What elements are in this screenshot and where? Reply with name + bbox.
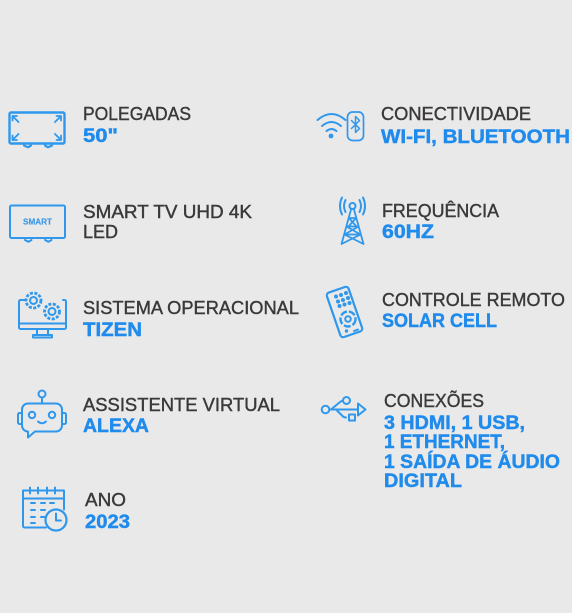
label: polegadas: POLEGADAS — [83, 104, 191, 124]
label: ano: 2023 — [85, 512, 130, 533]
label: controle remoto — [382, 290, 565, 332]
icon: remote control — [326, 286, 363, 338]
icon: calendar with clock — [23, 488, 66, 530]
icon: USB — [322, 397, 366, 420]
icon: wifi and bluetooth — [318, 112, 364, 140]
icon: robot assistant — [18, 390, 66, 438]
label: frequência: FREQUÊNCIA — [382, 201, 499, 221]
label: conexões: CONEXÕES — [384, 390, 484, 411]
label: conexões — [384, 390, 560, 492]
label: polegadas — [83, 104, 191, 147]
label: frequência — [382, 201, 499, 243]
label: conectividade: WI-FI, BLUETOOTH — [381, 127, 570, 148]
label: sistema operacional — [83, 298, 299, 341]
icon: smart TV: SMART — [23, 216, 53, 226]
label: assistente virtual — [83, 395, 280, 437]
label: assistente virtual: ASSISTENTE VIRTUAL — [83, 395, 280, 415]
label: conexões: DIGITAL — [384, 471, 462, 492]
icon: radio tower — [340, 198, 365, 244]
label: ano — [85, 490, 130, 533]
label: frequência: 60HZ — [382, 222, 434, 243]
label: smart TV: SMART TV UHD 4K — [83, 202, 252, 222]
label: polegadas: 50" — [83, 126, 118, 147]
label: conexões: 1 ETHERNET, — [384, 432, 505, 453]
icon: operating system monitor with gears — [19, 293, 66, 338]
label: smart TV: LED — [83, 222, 118, 242]
label: conectividade: CONECTIVIDADE — [381, 104, 531, 124]
label: controle remoto: CONTROLE REMOTO — [382, 290, 565, 310]
label: conexões: 1 SAÍDA DE ÁUDIO — [384, 451, 560, 473]
label: conectividade — [381, 104, 570, 148]
label: smart TV — [83, 202, 252, 242]
icon: screen size TV — [10, 112, 64, 147]
icon: smart TV — [10, 206, 65, 242]
label: controle remoto: SOLAR CELL — [382, 311, 497, 332]
label: sistema operacional: TIZEN — [83, 320, 142, 341]
label: assistente virtual: ALEXA — [83, 416, 149, 437]
label: ano: ANO — [85, 490, 126, 510]
label: conexões: 3 HDMI, 1 USB, — [384, 413, 525, 434]
label: sistema operacional: SISTEMA OPERACIONAL — [83, 298, 299, 318]
